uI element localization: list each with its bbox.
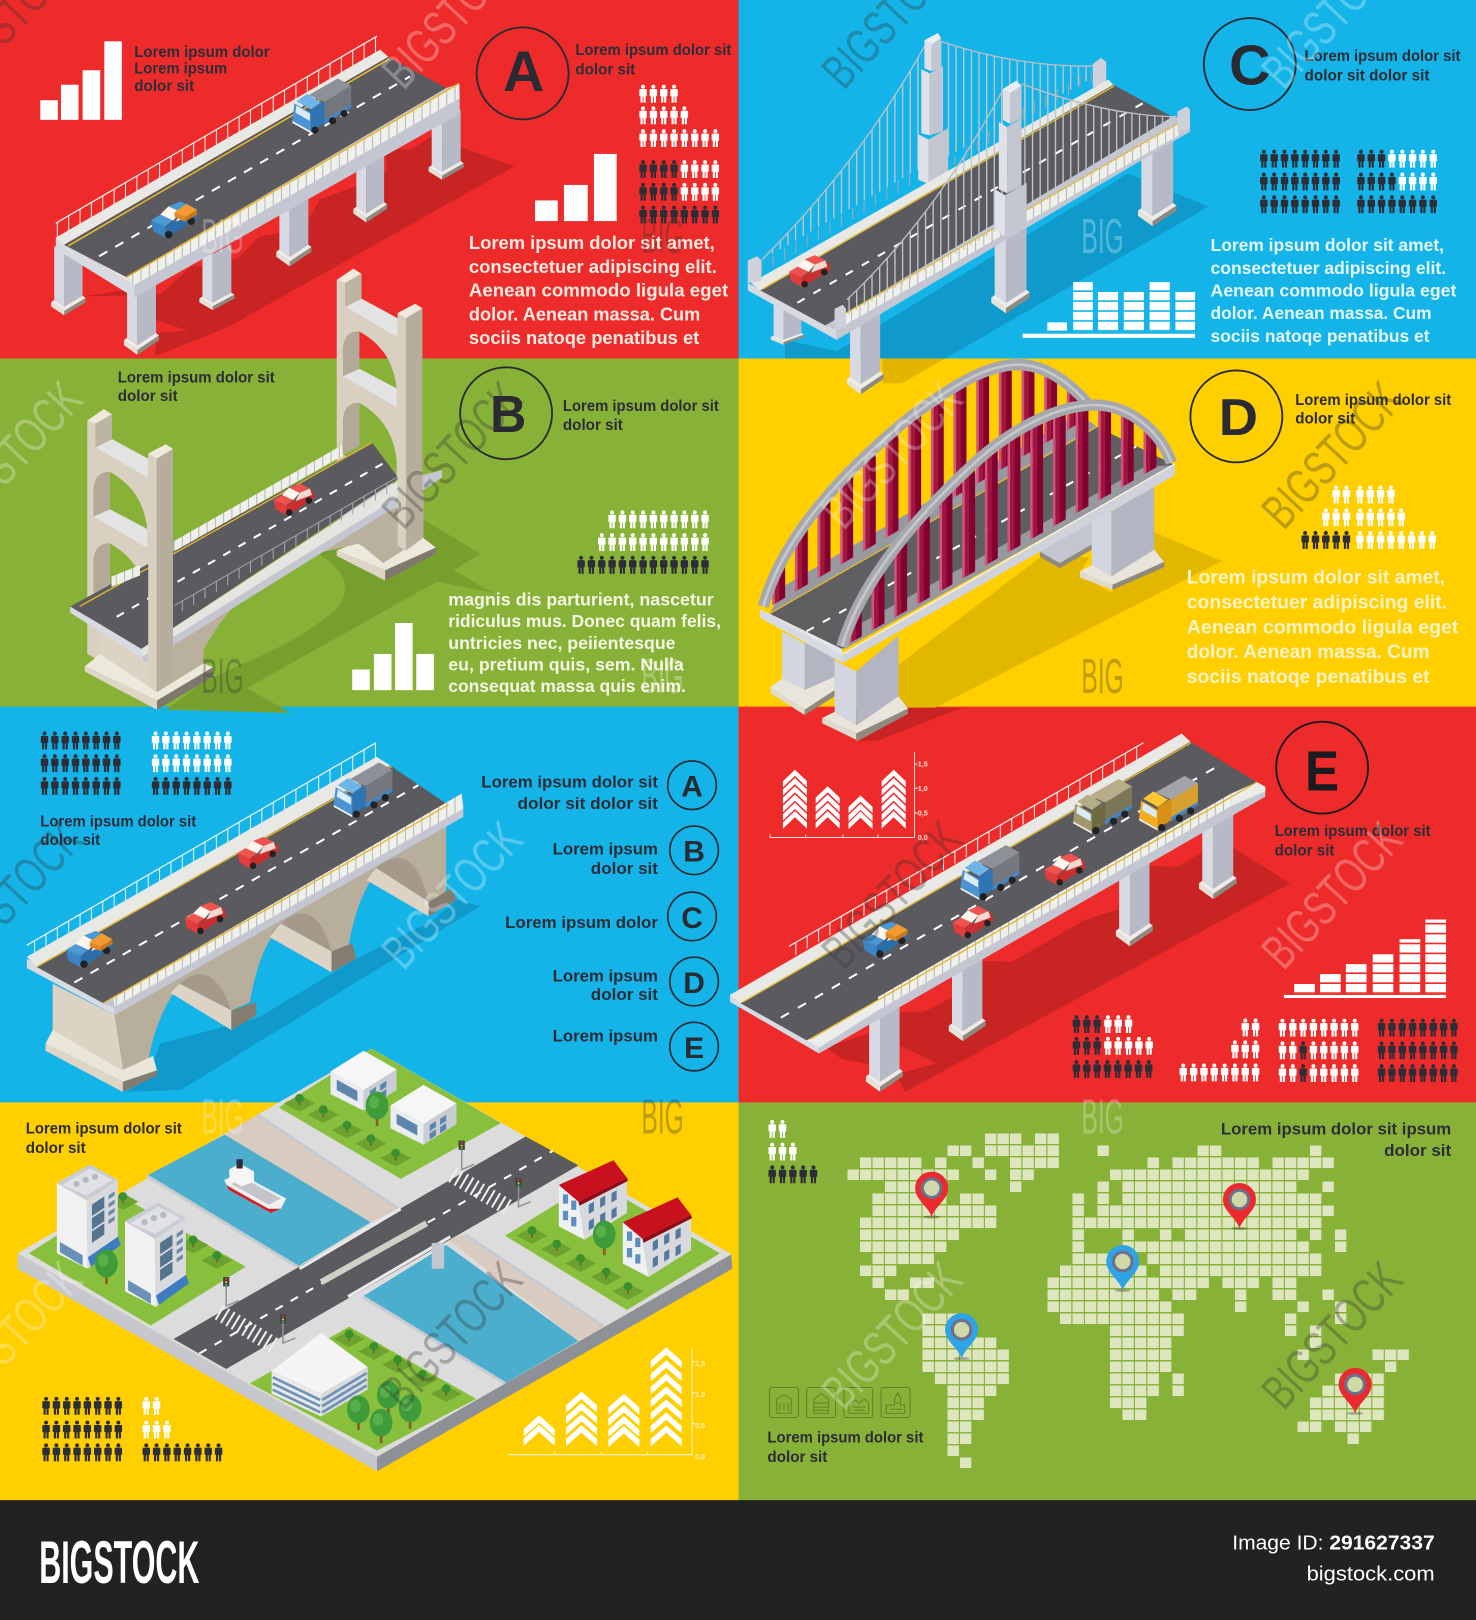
badge B: B <box>490 385 526 443</box>
legend: lettered list A to E: C <box>681 902 703 935</box>
badge E: E <box>1305 740 1339 803</box>
legend: lettered list A to E: A <box>681 771 703 804</box>
text: badge B caption <box>563 398 719 434</box>
badge E <box>1276 722 1368 814</box>
watermarks: BIG <box>201 208 244 264</box>
paragraph: yellow panel D: sociis natoqe penatibus et <box>1187 666 1430 688</box>
paragraph: green panel: eu, pretium quis, sem. Nulla <box>448 655 684 675</box>
badge C <box>1204 18 1296 110</box>
text: badge A caption: dolor sit <box>575 61 635 78</box>
watermarks: BIG <box>1081 648 1124 704</box>
paragraph: blue panel C <box>1211 235 1457 346</box>
bridge A: viaduct on pillars <box>51 36 514 356</box>
text: map panel top right: dolor sit <box>1384 1141 1452 1160</box>
chevron chart: yellow panel: 0,5 <box>695 1421 705 1430</box>
text: badge D caption: Lorem ipsum dolor sit <box>1295 392 1451 409</box>
paragraph: blue panel C: dolor. Aenean massa. Cum <box>1211 303 1432 323</box>
legend: lettered list A to E: Lorem ipsum dolor <box>505 913 659 932</box>
badge B <box>460 367 552 459</box>
legend: lettered list A to E: E <box>684 1032 704 1065</box>
watermarks: BIGSTOCK <box>371 1251 533 1419</box>
chevron chart: red panel: 0,5 <box>918 809 928 818</box>
chevron chart: yellow panel <box>508 1347 705 1461</box>
paragraph: green panel: untricies nec, peiientesque <box>448 633 676 653</box>
paragraph: green panel: magnis dis parturient, nascetur <box>448 589 714 609</box>
badge A <box>477 27 569 119</box>
watermarks: BIG <box>1081 1088 1124 1144</box>
text: yellow panel caption: Lorem ipsum dolor sit <box>26 1120 182 1137</box>
pixel world map <box>847 1133 1410 1470</box>
paragraph: red panel <box>469 232 728 348</box>
chevron chart: red panel <box>770 752 928 842</box>
text: red panel top left: dolor sit <box>134 78 194 95</box>
paragraph: green panel <box>448 589 721 696</box>
chevron chart: yellow panel: 0,0 <box>695 1452 705 1461</box>
text: badge C caption: Lorem ipsum dolor sit <box>1305 48 1461 65</box>
text: badge C caption: dolor sit dolor sit <box>1305 68 1430 85</box>
watermarks: BIGSTOCK <box>1251 371 1413 539</box>
paragraph: yellow panel D: dolor. Aenean massa. Cum <box>1187 641 1430 663</box>
legend: lettered list A to E: dolor sit <box>591 985 658 1004</box>
footer image id: bigstock.com <box>1307 1563 1435 1586</box>
people pictogram: blue panel <box>41 731 232 795</box>
paragraph: yellow panel D: Lorem ipsum dolor sit amet, <box>1187 567 1445 589</box>
paragraph: yellow panel D: Aenean commodo ligula eget <box>1187 616 1459 638</box>
legend: lettered list A to E: Lorem ipsum <box>553 839 658 858</box>
watermarks: BIGSTOCK <box>811 811 973 979</box>
people pictogram: green panel B <box>577 510 709 574</box>
legend: lettered list A to E: Lorem ipsum <box>553 1026 658 1045</box>
text: badge E caption: dolor sit <box>1275 842 1334 859</box>
text: badge A caption <box>575 42 731 78</box>
footer image id <box>1232 1532 1435 1586</box>
text: badge E caption: Lorem ipsum dolor sit <box>1275 823 1431 840</box>
text: badge B caption: dolor sit <box>563 417 623 434</box>
text: yellow panel caption <box>26 1120 182 1157</box>
legend: lettered list A to E: Lorem ipsum dolor sit <box>481 772 658 791</box>
icons: four buildings <box>770 1388 910 1418</box>
footer image id: Image ID: 291627337 <box>1232 1532 1435 1555</box>
chevron chart: red panel: 1,5 <box>918 760 928 769</box>
text: green panel B top left: dolor sit <box>118 388 178 405</box>
bridge: stone arch viaduct, blue panel <box>27 743 480 1092</box>
paragraph: red panel: consectetuer adipiscing elit. <box>469 256 717 277</box>
text: map panel top right <box>1221 1119 1452 1160</box>
paragraph: green panel: ridiculus mus. Donec quam felis, <box>448 611 721 631</box>
text: yellow panel caption: dolor sit <box>26 1140 86 1157</box>
footer logo: BIGSTOCK <box>39 1529 199 1596</box>
paragraph: red panel: Aenean commodo ligula eget <box>469 280 728 301</box>
text: badge D caption: dolor sit <box>1295 411 1355 428</box>
paragraph: blue panel C: consectetuer adipiscing elit. <box>1211 258 1446 278</box>
legend: lettered list A to E: dolor sit <box>591 859 658 878</box>
text: green panel B top left: Lorem ipsum dolor sit <box>118 369 275 386</box>
watermarks: BIGSTOCK <box>1251 1251 1413 1419</box>
text: blue panel caption: dolor sit <box>40 832 100 849</box>
paragraph: yellow panel D <box>1187 567 1459 688</box>
chevron chart: red panel: 1,0 <box>918 784 928 793</box>
chevron chart: yellow panel: 1,5 <box>695 1359 705 1368</box>
text: map panel bottom left <box>767 1429 923 1466</box>
watermarks: BIGSTOCK <box>1251 811 1413 979</box>
text: badge C caption <box>1305 48 1461 85</box>
bridge E: long viaduct <box>730 734 1290 1092</box>
bridge D: arch bridge <box>760 365 1222 742</box>
people pictogram: red panel E <box>1073 1015 1458 1082</box>
watermarks: BIG <box>641 1088 684 1144</box>
map pins <box>915 1172 1372 1415</box>
chevron chart: yellow panel: 1,0 <box>695 1390 705 1399</box>
watermarks: BIGSTOCK <box>371 811 533 979</box>
text: badge D caption <box>1295 392 1451 428</box>
people pictogram: blue panel C <box>1260 150 1437 213</box>
text: map panel bottom left: dolor sit <box>767 1449 827 1466</box>
watermarks: BIG <box>201 648 244 704</box>
bar chart: green panel <box>352 623 434 690</box>
text: blue panel caption: Lorem ipsum dolor sit <box>40 814 196 831</box>
people pictogram: red panel A <box>639 85 719 223</box>
legend: lettered list A to E: D <box>683 967 705 1000</box>
text: green panel B top left <box>118 369 275 405</box>
text: red panel top left: Lorem ipsum <box>134 60 227 77</box>
badge A: A <box>503 40 544 104</box>
bridge B: stone towers <box>70 269 494 713</box>
people pictogram: map panel <box>768 1120 817 1183</box>
paragraph: red panel: dolor. Aenean massa. Cum <box>469 303 700 324</box>
stacked bar chart: blue panel C <box>1023 282 1195 338</box>
badge C: C <box>1229 35 1270 98</box>
paragraph: blue panel C: Aenean commodo ligula eget <box>1211 281 1457 301</box>
watermarks: BIG <box>641 648 684 704</box>
legend: lettered list A to E: Lorem ipsum <box>553 967 658 986</box>
chevron chart: red panel: 0,0 <box>918 833 928 842</box>
paragraph: green panel: consequat massa quis enim. <box>448 676 686 696</box>
text: map panel bottom left: Lorem ipsum dolor sit <box>767 1429 923 1446</box>
watermarks: BIGSTOCK <box>811 1251 973 1419</box>
text: badge E caption <box>1275 823 1431 859</box>
paragraph: blue panel C: sociis natoqe penatibus et <box>1211 326 1430 346</box>
text: map panel top right: Lorem ipsum dolor sit ipsum <box>1221 1119 1451 1138</box>
watermarks: BIG <box>201 1088 244 1144</box>
legend: lettered list A to E: dolor sit dolor sit <box>517 794 658 813</box>
text: red panel top left: Lorem ipsum dolor <box>134 44 270 61</box>
watermarks: BIG <box>1081 208 1124 264</box>
text: blue panel caption <box>40 814 196 849</box>
legend: lettered list A to E: B <box>683 836 705 869</box>
text: badge A caption: Lorem ipsum dolor sit <box>575 42 731 59</box>
bar chart: red panel left <box>40 41 122 120</box>
bar chart: red panel right <box>535 154 617 221</box>
people pictogram: yellow panel D <box>1301 486 1436 549</box>
bridge C: suspension bridge <box>748 33 1208 394</box>
badge D <box>1190 370 1282 462</box>
watermarks: BIGSTOCK <box>811 371 973 539</box>
badge D: D <box>1219 388 1258 446</box>
watermarks: BIGSTOCK <box>371 371 533 539</box>
paragraph: red panel: sociis natoqe penatibus et <box>469 327 699 348</box>
isometric city block <box>18 1049 732 1471</box>
text: badge B caption: Lorem ipsum dolor sit <box>563 398 719 415</box>
paragraph: yellow panel D: consectetuer adipiscing elit. <box>1187 592 1447 614</box>
text: red panel top left <box>134 44 270 95</box>
paragraph: red panel: Lorem ipsum dolor sit amet, <box>469 232 715 253</box>
paragraph: blue panel C: Lorem ipsum dolor sit amet, <box>1211 235 1444 255</box>
legend: lettered list A to E <box>481 761 718 1071</box>
stacked bar chart: red panel E <box>1284 920 1446 998</box>
watermarks: BIG <box>641 208 684 264</box>
people pictogram: yellow panel <box>42 1397 222 1461</box>
